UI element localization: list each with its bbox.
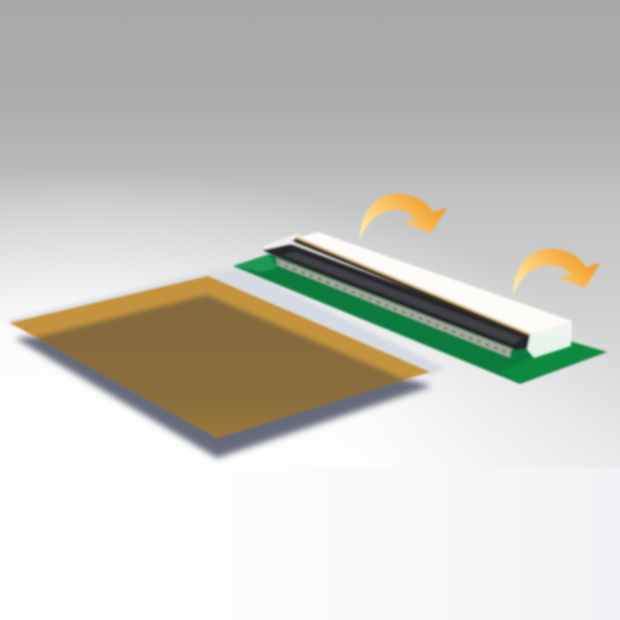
arrow 2 [513,249,600,295]
connector end highlight [262,233,304,250]
film dark centre [34,293,406,438]
connector white end [527,321,572,358]
circuit board [233,254,607,384]
connector [262,232,572,358]
connector black actuator [263,244,532,350]
reflection strip between film and board [8,268,445,376]
film border [10,276,430,438]
arrow 1 [360,194,447,239]
flexible film [10,276,430,452]
connector white top [296,232,572,335]
film shadow [15,330,432,458]
connector metal contacts [276,258,512,358]
